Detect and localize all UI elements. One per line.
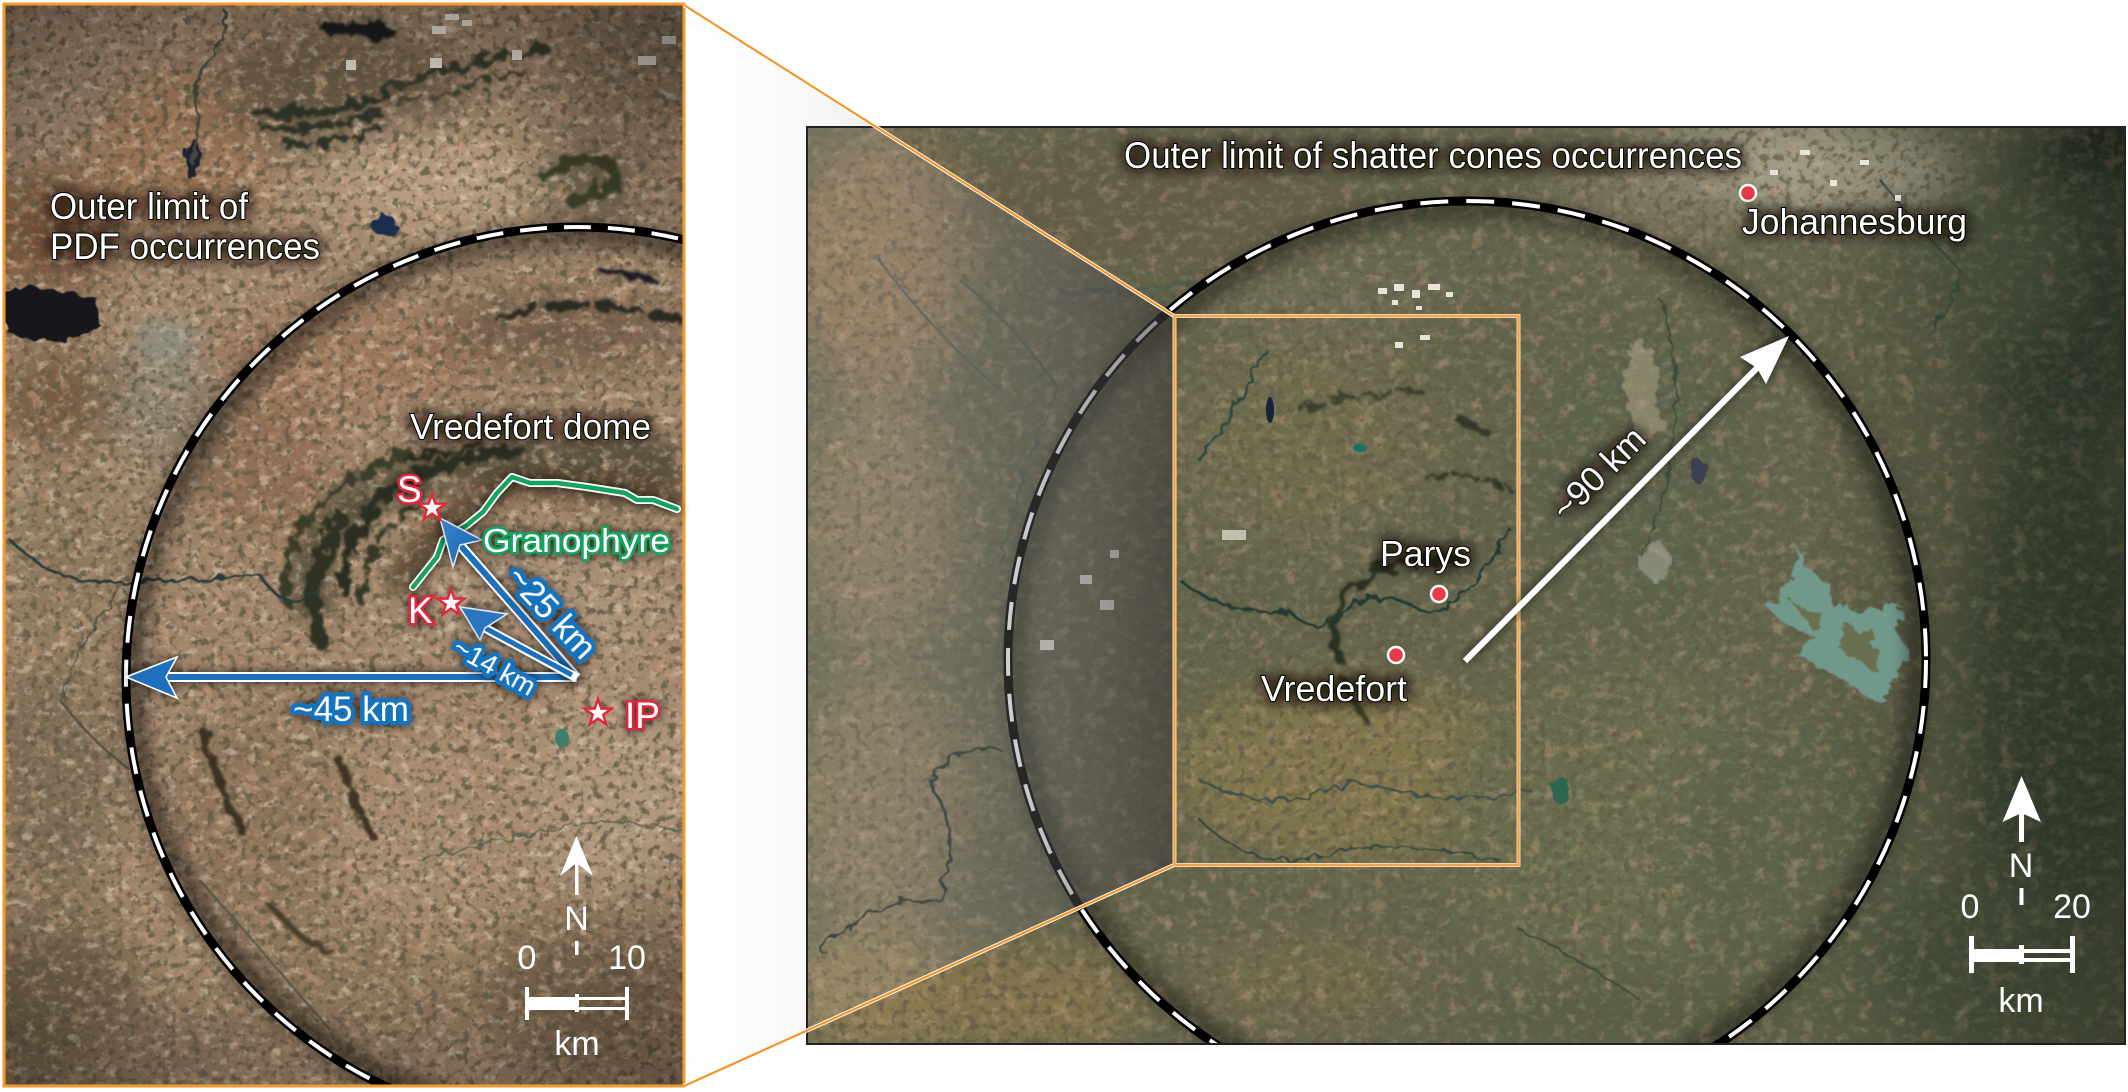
- north arrow and scale: right panel: 0: [1961, 888, 1979, 926]
- circle: outer limit of shatter cones: [1008, 201, 1926, 1092]
- shaded projection between panels: [684, 5, 1174, 1086]
- north arrow and scale: right panel: km: [1998, 982, 2044, 1020]
- dark ridges: [205, 28, 680, 950]
- label: ~25 km: ~25 km: [499, 559, 604, 667]
- urban patches: [1040, 150, 1901, 650]
- label: Vredefort dome: Vredefort dome: [410, 406, 651, 447]
- panel: right satellite overview: [806, 94, 2126, 1045]
- north arrow and scale: left panel: N: [564, 900, 589, 938]
- label: Granophyre: Granophyre: [483, 522, 670, 559]
- site S: S: [397, 469, 422, 510]
- circle: outer limit of PDF occurrences: [112, 214, 682, 1084]
- label: outer limit of shatter cones: Outer limit of shatter cones occurrences: [1124, 135, 1742, 176]
- site IP: [585, 695, 660, 736]
- panel: left satellite close-up: [2, 2, 686, 1088]
- arrow: ~25 km: [440, 518, 577, 678]
- rivers: [820, 180, 1960, 1000]
- north arrow and scale: right panel: N: [2009, 847, 2033, 885]
- north arrow and scale: left panel: 0: [518, 939, 536, 977]
- site K: K: [408, 590, 433, 631]
- label: outer limit of PDF occurrences: PDF occurrences: [50, 226, 320, 267]
- site K: [408, 589, 464, 631]
- north arrow and scale: left panel: 10: [608, 939, 646, 977]
- label: outer limit of PDF occurrences: Outer limit of: [50, 186, 249, 227]
- collar ridges: [1060, 280, 1510, 720]
- north arrow and scale: left panel: km: [554, 1025, 600, 1063]
- panel border: [807, 127, 2125, 1044]
- line: granophyre boundary: [413, 477, 677, 587]
- site IP: IP: [625, 695, 660, 736]
- urban patches: [346, 14, 676, 70]
- label: ~45 km: ~45 km: [293, 690, 409, 729]
- north arrow and scale: right panel: [1961, 776, 2091, 1020]
- label: ~14 km: ~14 km: [448, 632, 541, 702]
- north arrow and scale: left panel: [518, 836, 646, 1063]
- lake: [1766, 544, 1910, 708]
- city: Parys: [1380, 533, 1471, 602]
- water bodies: [5, 10, 684, 1030]
- north arrow and scale: right panel: 20: [2053, 888, 2091, 926]
- label: ~90 km: ~90 km: [1544, 419, 1654, 529]
- arrow: ~90 km radius: [1465, 336, 1789, 661]
- city: Vredefort: Vredefort: [1261, 668, 1407, 709]
- inset box and projection lines: [684, 5, 1518, 1086]
- city: Johannesburg: Johannesburg: [1742, 201, 1967, 242]
- arrow: ~45 km: [126, 657, 577, 698]
- collar shadow around granophyre: [310, 460, 684, 620]
- city: Vredefort: [1261, 647, 1407, 709]
- arrow: ~14 km: [460, 607, 577, 678]
- label: outer limit of PDF occurrences: [50, 186, 320, 267]
- panel border: [4, 4, 684, 1086]
- site S: [397, 469, 445, 519]
- city: Parys: Parys: [1380, 533, 1471, 574]
